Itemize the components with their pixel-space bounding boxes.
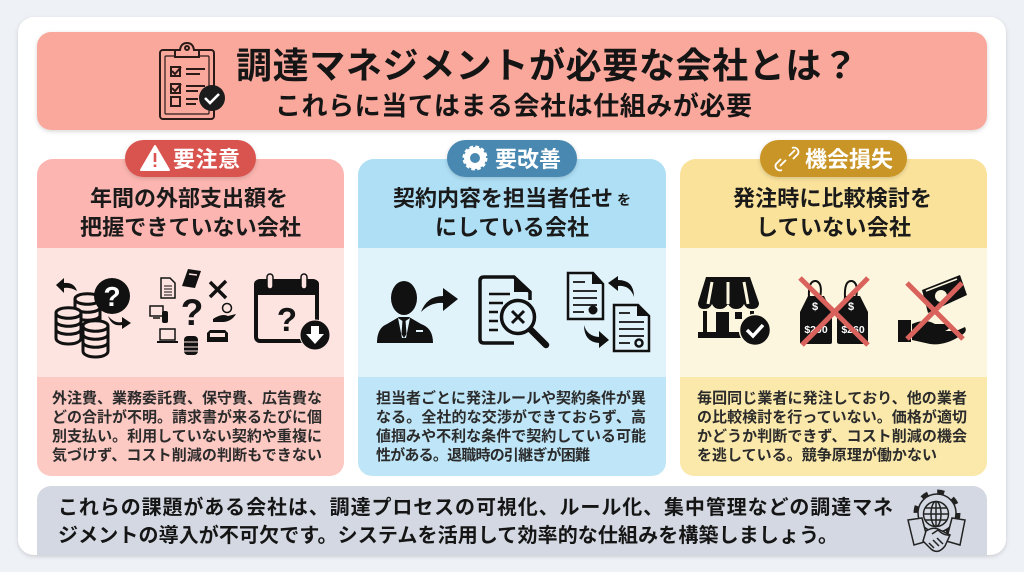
body text: を逃している。競争原理が働かない: [697, 446, 937, 464]
title: 調達マネジメントが必要な会社とは？: [236, 45, 858, 86]
heading: 契約内容を担当者任せ: [393, 186, 613, 211]
heading: 発注時に比較検討を: [733, 186, 932, 211]
icon: crossed out price tags: $200: [804, 324, 828, 336]
icon: calendar with question: [254, 274, 330, 350]
badge: 機会損失: [760, 140, 907, 177]
icon: expense categories: [150, 269, 236, 355]
heading: 把握できていない会社: [80, 215, 301, 240]
body text: [52, 389, 322, 464]
panel: 機会損失: [680, 140, 987, 476]
body text: 毎回同じ業者に発注しており、他の業者: [697, 389, 967, 407]
icon: coins with question: ?: [103, 281, 121, 312]
body text: 別支払い。利用していない契約や重複に: [52, 427, 322, 445]
badge: 要注意: [125, 140, 256, 177]
red cross: [800, 278, 868, 345]
body text: [376, 389, 646, 464]
icon: crossed out price tags: $: [848, 301, 854, 313]
body text: 外注費、業務委託費、保守費、広告費な: [52, 389, 322, 407]
summary text: ジメントの導入が不可欠です。システムを活用して効率的な仕組みを構築しましょう。: [58, 523, 838, 547]
icon: coins with question: [56, 278, 131, 357]
body text: 値掴みや不利な条件で契約している可能: [376, 427, 646, 445]
heading: 年間の外部支出額を: [90, 186, 288, 211]
icon: calendar with question: ?: [277, 301, 297, 338]
summary text: これらの課題がある会社は、調達プロセスの可視化、ルール化、集中管理などの調達マネ: [58, 495, 893, 519]
body text: の比較検討を行っていない。価格が適切: [697, 408, 967, 426]
icon: clipboard checklist: [160, 43, 225, 119]
body text: かどうか判断できず、コスト削減の機会: [697, 427, 967, 445]
summary text: [58, 495, 893, 547]
heading: していない会社: [756, 215, 911, 240]
icon: document with magnifier: [480, 277, 546, 345]
icon: gear globe handshake: [908, 492, 965, 551]
heading: [733, 186, 932, 240]
heading: を: [617, 192, 631, 208]
icon: crossed out price tags: [800, 278, 868, 345]
badge: 要改善: [447, 140, 577, 177]
icon: documents exchange: [568, 273, 649, 351]
panel: 要改善: [358, 140, 666, 476]
heading: にしている会社: [435, 215, 589, 240]
bottom summary bar: [37, 486, 987, 555]
red cross: [907, 283, 963, 339]
subtitle: これらに当てはまる会社は仕組みが必要: [275, 91, 752, 121]
body text: 担当者ごとに発注ルールや契約条件が異: [376, 389, 646, 407]
body text: 性がある。退職時の引継ぎが困難: [376, 446, 590, 464]
icon: expense categories: ?: [181, 292, 203, 333]
icon: store with check: [698, 277, 770, 346]
body text: なる。全社的な交渉ができておらず、高: [376, 408, 646, 426]
icon: crossed out price tags: $260: [841, 324, 865, 336]
badge: 要注意: 要注意: [173, 147, 240, 172]
badge: 要改善: 要改善: [495, 147, 561, 172]
badge: 機会損失: 機会損失: [805, 147, 893, 172]
panel: 要注意: [37, 140, 344, 476]
heading: [393, 186, 631, 240]
icon: crossed out price tags: $: [812, 301, 818, 313]
header banner: [37, 32, 987, 130]
icon: crossed out money in hand: [898, 275, 967, 344]
heading: [80, 186, 301, 240]
body text: [697, 389, 967, 464]
icon: person handing off: [377, 281, 458, 343]
body text: どの合計が不明。請求書が来るたびに個: [52, 408, 322, 426]
body text: 気づけず、コスト削減の判断もできない: [52, 446, 322, 464]
